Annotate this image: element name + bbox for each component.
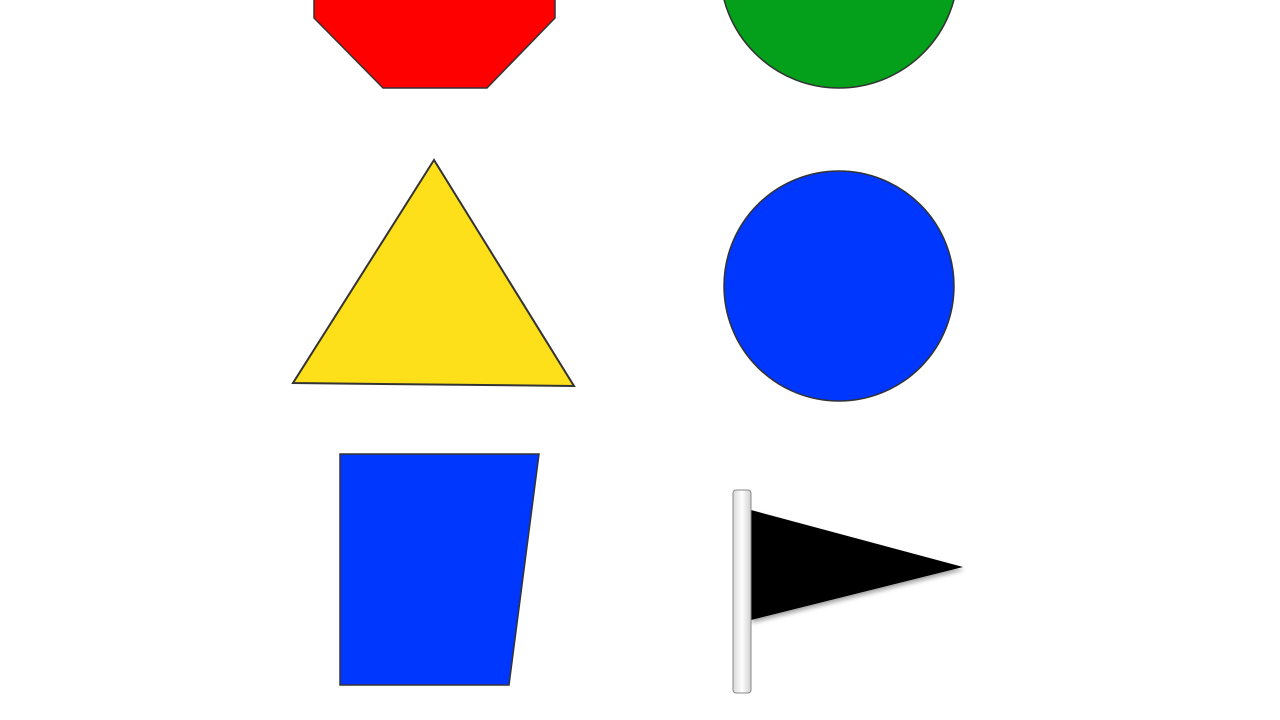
shape: green circle <box>720 0 958 88</box>
shape: red octagon <box>314 0 555 88</box>
icon: black flag <box>733 490 963 693</box>
shape: yellow triangle <box>293 160 574 386</box>
shape: blue quadrilateral <box>340 454 539 685</box>
shape: blue circle <box>724 171 954 401</box>
